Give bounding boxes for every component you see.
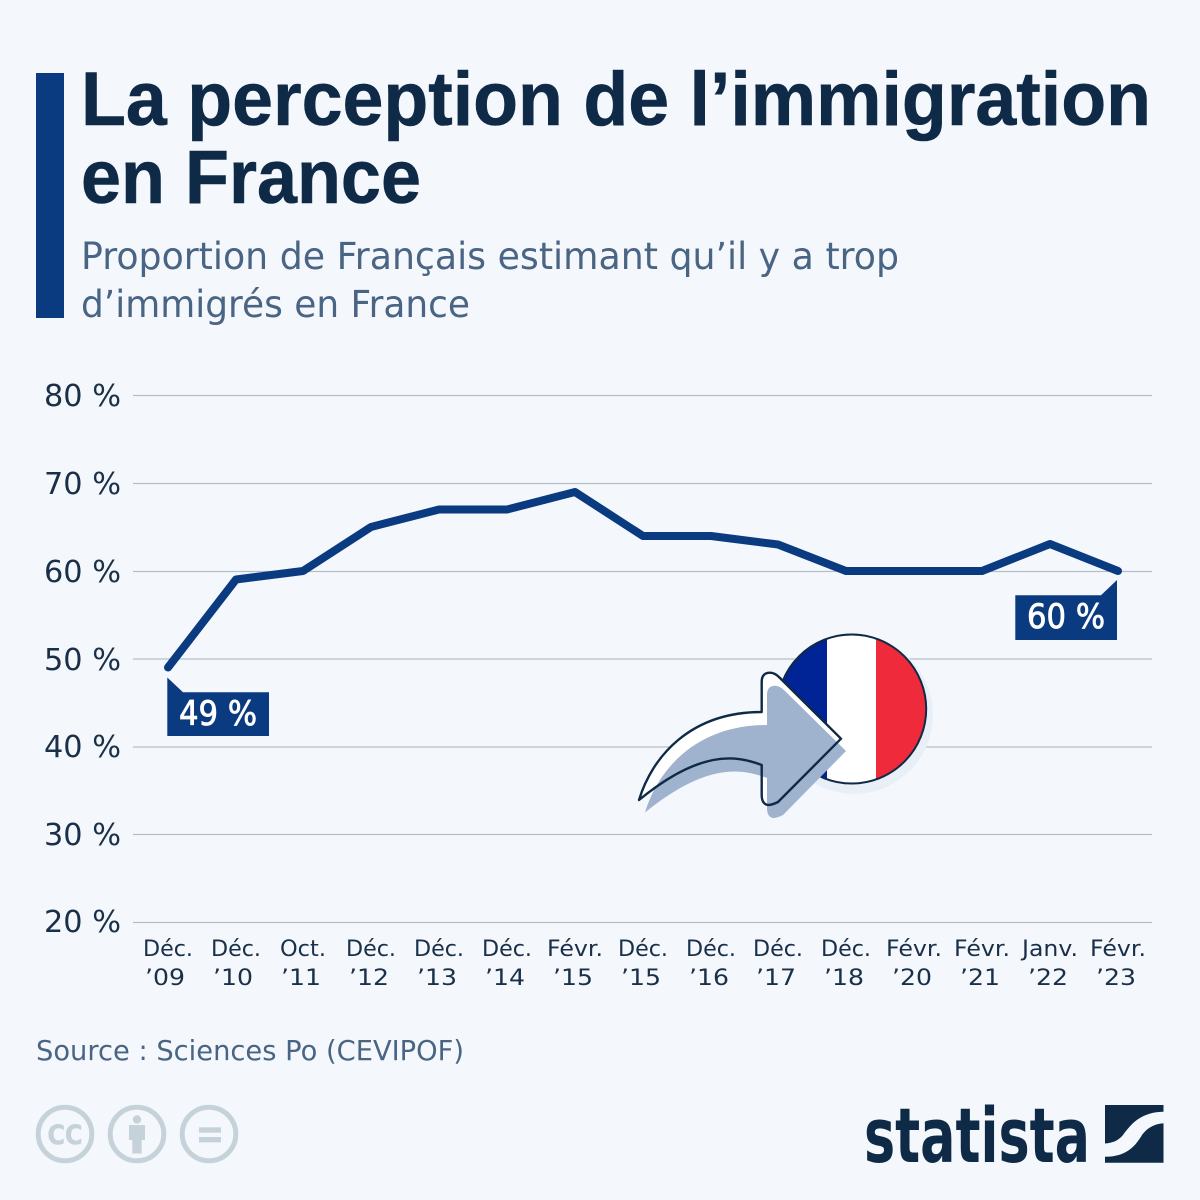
y axis labels: 40 %	[44, 730, 121, 765]
y axis labels	[44, 379, 121, 940]
callout: 60 %: 60 %	[1027, 597, 1105, 637]
x axis labels: Déc.	[618, 936, 668, 962]
x axis labels: ’15	[621, 965, 661, 991]
x axis labels: ’17	[756, 965, 796, 991]
x axis labels: ’11	[281, 965, 321, 991]
title accent bar	[36, 73, 64, 318]
x axis labels: Déc.	[211, 936, 261, 962]
source: Source : Sciences Po (CEVIPOF)	[36, 1034, 464, 1067]
x axis labels: Déc.	[821, 936, 871, 962]
y axis labels: 30 %	[44, 818, 121, 853]
title: en France	[81, 135, 421, 220]
x axis labels: Déc.	[143, 936, 193, 962]
x axis labels: Févr.	[547, 936, 603, 962]
statista logo mark	[1105, 1105, 1164, 1163]
x axis labels: Févr.	[954, 936, 1010, 962]
x axis labels: Janv.	[1020, 936, 1078, 962]
y axis labels: 60 %	[44, 555, 121, 590]
subtitle: Proportion de Français estimant qu’il y a trop	[81, 235, 899, 278]
x axis labels: ’22	[1028, 965, 1068, 991]
callout: 60 %	[1015, 580, 1117, 640]
x axis labels: Oct.	[280, 936, 326, 962]
x axis labels: Déc.	[686, 936, 736, 962]
x axis labels: ’21	[960, 965, 1000, 991]
x axis labels	[143, 936, 1146, 991]
icon: attribution	[110, 1107, 164, 1161]
statista wordmark: statista	[864, 1091, 1090, 1180]
icon: creative commons: CC	[48, 1120, 82, 1151]
icon: French flag with arrow	[639, 630, 933, 818]
x axis labels: ’15	[553, 965, 593, 991]
x axis labels: Févr.	[1090, 936, 1146, 962]
subtitle: d’immigrés en France	[81, 283, 470, 326]
x axis labels: Déc.	[414, 936, 464, 962]
callout: 49 %: 49 %	[179, 694, 257, 734]
x axis labels: ’13	[417, 965, 457, 991]
x axis labels: ’23	[1096, 965, 1136, 991]
x axis labels: Févr.	[886, 936, 942, 962]
icon: creative commons	[38, 1107, 92, 1161]
line chart	[168, 492, 1118, 668]
x axis labels: ’16	[689, 965, 729, 991]
callout: 49 %	[167, 678, 269, 736]
subtitle	[81, 235, 899, 326]
title: La perception de l’immigration	[81, 57, 1151, 142]
y axis labels: 20 %	[44, 905, 121, 940]
x axis labels: ’12	[349, 965, 389, 991]
x axis labels: ’20	[892, 965, 932, 991]
x axis labels: ’14	[485, 965, 525, 991]
x axis labels: Déc.	[346, 936, 396, 962]
y axis labels: 50 %	[44, 643, 121, 678]
x axis labels: ’10	[213, 965, 253, 991]
x axis labels: Déc.	[482, 936, 532, 962]
title	[81, 57, 1151, 220]
x axis labels: ’09	[145, 965, 185, 991]
icon: no derivatives	[182, 1107, 236, 1161]
x axis labels: ’18	[824, 965, 864, 991]
x axis labels: Déc.	[753, 936, 803, 962]
y axis labels: 70 %	[44, 467, 121, 502]
y axis labels: 80 %	[44, 379, 121, 414]
